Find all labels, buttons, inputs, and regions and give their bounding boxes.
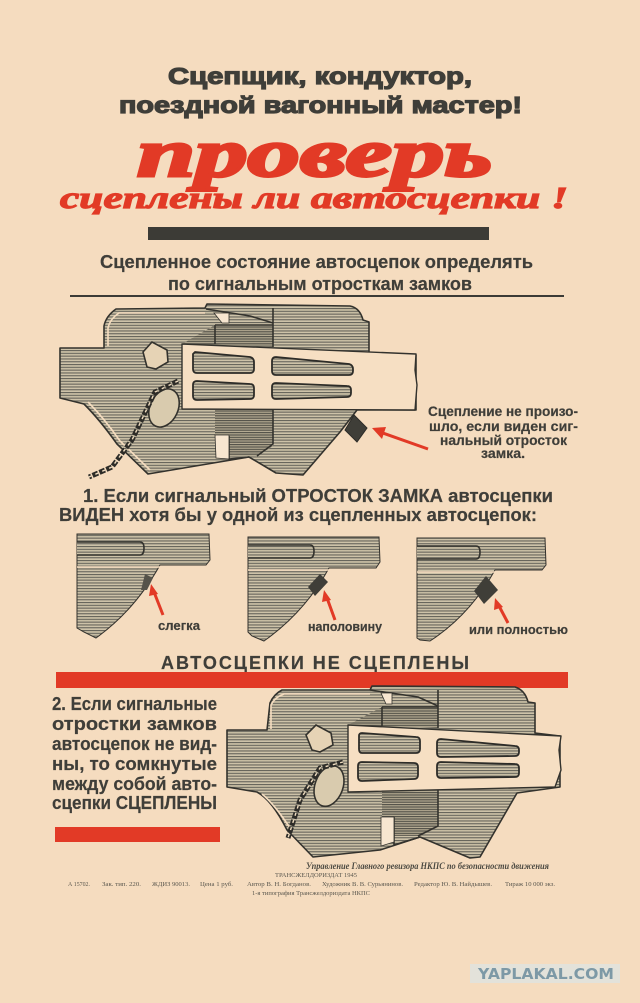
section 2 text: отростки замков (52, 713, 217, 734)
cover ellipse (309, 761, 349, 811)
section 2 text: сцепки СЦЕПЛЕНЫ (52, 792, 217, 813)
title: red script (60, 115, 568, 215)
note: coupling failed: нальный отросток (440, 433, 567, 448)
detail 1: slightly visible: слегка (158, 618, 201, 633)
plate (348, 725, 561, 792)
heading: addressees: поездной вагонный мастер! (119, 92, 522, 118)
section 2 text: между собой авто- (52, 773, 217, 794)
imprint: Автор В. Н. Богданов. (247, 882, 312, 888)
red bar lower (55, 827, 220, 842)
imprint (68, 872, 556, 897)
chain (89, 381, 178, 477)
heading: addressees: Сцепщик, кондуктор, (168, 63, 472, 89)
plate slots (358, 733, 519, 781)
plate slots (193, 352, 353, 400)
arrow to signal projection (372, 427, 428, 449)
illustration: coupled automatic couplers (227, 686, 561, 858)
subheading (100, 252, 533, 294)
section 2 text: ны, то сомкнутые (52, 753, 217, 774)
publisher credit: Управление Главного ревизора НКПС по безопасности движения (306, 861, 549, 872)
black bar (148, 227, 489, 240)
heading: addressees (119, 63, 522, 118)
hexagon lock detail (306, 725, 333, 752)
detail 3: fully visible (417, 538, 568, 641)
section 2 text (52, 693, 217, 813)
note: coupling failed (428, 404, 578, 461)
title: red script: сцеплены ли автосцепки ! (60, 180, 568, 215)
verdict heading: АВТОСЦЕПКИ НЕ СЦЕПЛЕНЫ (161, 653, 469, 673)
detail 3: fully visible: или полностью (469, 622, 568, 637)
detail 2: half visible (248, 537, 383, 641)
subheading: по сигнальным отросткам замков (168, 274, 472, 294)
section 1 heading (59, 486, 553, 525)
note: coupling failed: замка. (481, 446, 525, 461)
imprint: ЖДИЗ 90013. (152, 882, 191, 888)
cover ellipse (143, 384, 185, 432)
imprint: А 15702. (68, 882, 90, 888)
section 2 text: 2. Если сигнальные (52, 693, 217, 714)
imprint: 1-я типография Трансжелдориздата НКПС (252, 890, 370, 897)
imprint: Тираж 10 000 экз. (505, 882, 556, 888)
section 2 text: автосцепок не вид- (52, 733, 217, 754)
imprint: Зак. тип. 220. (102, 882, 142, 888)
imprint: Редактор Ю. В. Найдышев. (414, 881, 493, 888)
detail 1: slightly visible (77, 534, 210, 638)
note: coupling failed: Сцепление не произо- (428, 404, 578, 419)
imprint: Цена 1 руб. (200, 881, 234, 888)
note: coupling failed: шло, если виден сиг- (429, 419, 578, 434)
watermark: YAPLAKAL.COM (477, 965, 614, 983)
hexagon lock detail (143, 342, 168, 369)
detail 2: half visible: наполовину (308, 619, 383, 634)
chain (288, 762, 343, 838)
imprint: Художник В. В. Сурьянинов. (322, 882, 404, 888)
red bar (56, 672, 568, 688)
title: red script: проверь (137, 115, 492, 191)
illustration: uncoupled automatic couplers (60, 304, 417, 477)
rule (70, 295, 564, 297)
subheading: Сцепленное состояние автосцепок определять (100, 252, 533, 272)
plate (182, 344, 417, 410)
section 1 heading: 1. Если сигнальный ОТРОСТОК ЗАМКА автосцепки (83, 486, 553, 506)
section 1 heading: ВИДЕН хотя бы у одной из сцепленных автосцепок: (59, 505, 537, 525)
imprint: ТРАНСЖЕЛДОРИЗДАТ 1945 (275, 872, 357, 879)
